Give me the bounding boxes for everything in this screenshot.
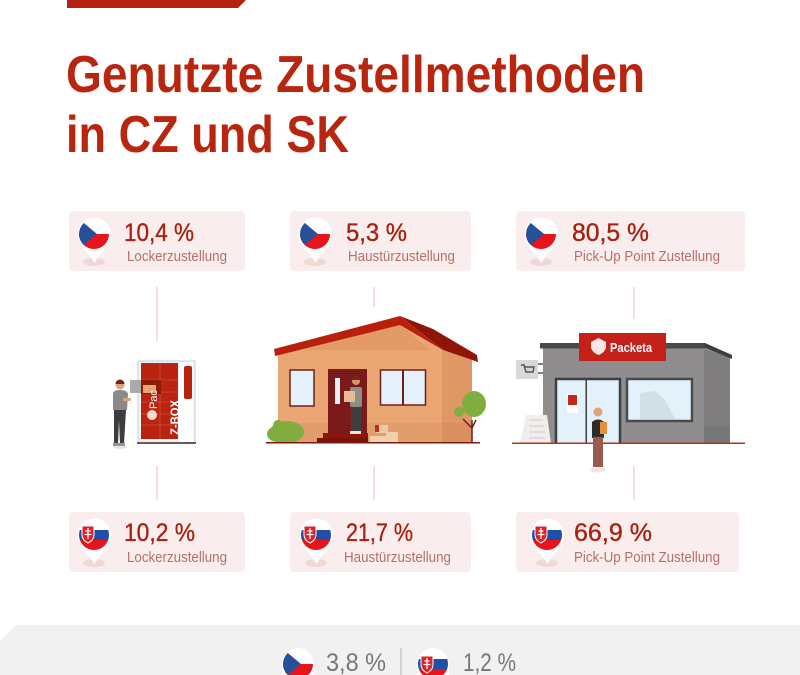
title: in CZ und SK [66,106,349,164]
panel: CZ home [290,211,471,271]
panel: SK pick-up point: 66,9 % [574,519,652,547]
panel: SK home [290,512,471,572]
panel: CZ home: 5,3 % [346,219,407,247]
panel: CZ locker [69,211,245,271]
top accent bar [67,0,246,8]
panel: CZ locker: 10,4 % [124,219,194,247]
title: Genutzte Zustellmethoden [66,46,645,104]
CZ other share [282,648,386,675]
panel: CZ pick-up point: 80,5 % [572,219,649,247]
SK other share [417,648,516,675]
panel: CZ locker: Lockerzustellung [127,249,227,265]
panel: CZ pick-up point [516,211,745,271]
illustration: Packeta shop [512,333,745,472]
panel: SK locker: Lockerzustellung [127,550,227,566]
illustration: Packeta shop: Packeta [610,340,653,355]
panel: SK locker [69,512,245,572]
illustration: locker with man: Pac [148,390,160,409]
illustration: house [266,316,486,444]
title [66,46,645,164]
panel: CZ home: Haustürzustellung [348,249,455,265]
panel: SK locker: 10,2 % [124,519,195,547]
panel: bottom grey section [0,625,800,675]
illustration: locker with man [113,361,196,449]
panel: CZ pick-up point: Pick-Up Point Zustellung [574,249,720,265]
illustration: locker with man: Z-BOX [168,400,182,435]
panel: SK home: 21,7 % [346,519,413,547]
panel: SK home: Haustürzustellung [344,550,451,566]
panel: SK pick-up point [516,512,739,572]
panel: SK pick-up point: Pick-Up Point Zustellung [574,550,720,566]
